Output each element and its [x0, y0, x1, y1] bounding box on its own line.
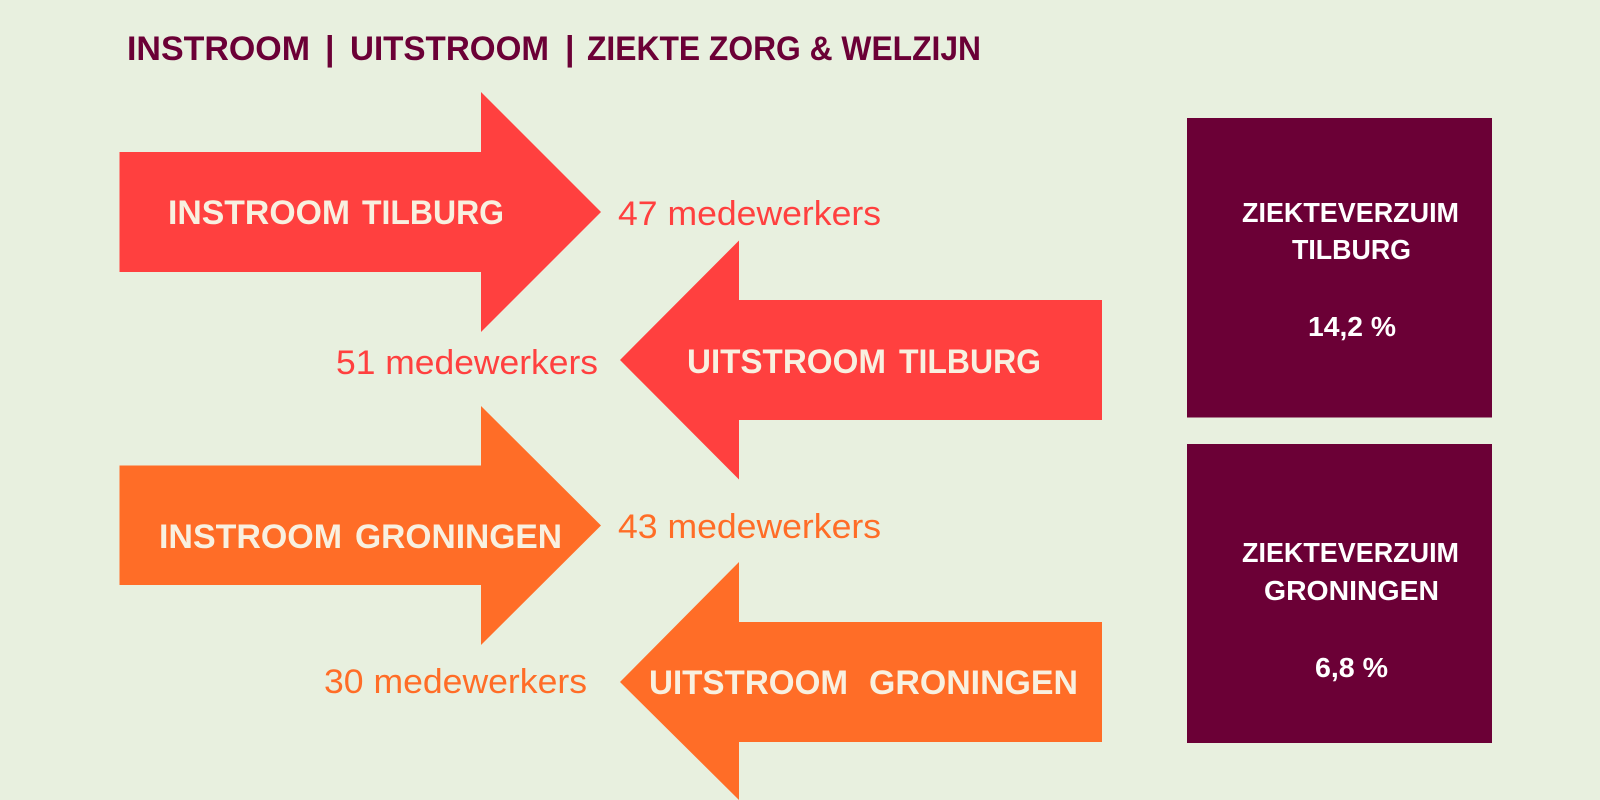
panel: ziekteverzuim Groningen: 6,8 % [1315, 652, 1388, 683]
panel: ziekteverzuim Tilburg [1187, 118, 1492, 418]
value: instroom Groningen: 43 medewerkers [618, 508, 881, 546]
arrow: uitstroom Groningen: UITSTROOM [649, 664, 848, 702]
value: instroom Tilburg: 47 medewerkers [618, 195, 881, 233]
arrow: instroom Tilburg: TILBURG [362, 194, 504, 232]
value: uitstroom Groningen: 30 medewerkers [324, 663, 587, 701]
arrow: uitstroom Groningen [620, 562, 1102, 800]
title: INSTROOM [127, 30, 310, 68]
panel: ziekteverzuim Groningen [1187, 444, 1492, 743]
arrow: instroom Groningen: GRONINGEN [355, 518, 562, 556]
panel: ziekteverzuim Tilburg: ZIEKTEVERZUIM [1242, 197, 1459, 228]
value: uitstroom Tilburg: 51 medewerkers [336, 344, 598, 382]
title [127, 30, 981, 68]
arrow: uitstroom Groningen: GRONINGEN [869, 664, 1078, 702]
panel: ziekteverzuim Tilburg: TILBURG [1292, 234, 1411, 265]
arrow: uitstroom Tilburg: UITSTROOM [687, 343, 886, 381]
title: | [325, 30, 335, 68]
panel: ziekteverzuim Groningen: ZIEKTEVERZUIM [1242, 537, 1459, 568]
title: UITSTROOM [350, 30, 549, 68]
panel: ziekteverzuim Tilburg: 14,2 % [1308, 311, 1396, 342]
arrow: instroom Tilburg: INSTROOM [168, 194, 350, 232]
arrow: uitstroom Tilburg: TILBURG [899, 343, 1041, 381]
panel: ziekteverzuim Groningen: GRONINGEN [1264, 575, 1439, 606]
title: | [565, 30, 575, 68]
title: ZIEKTE ZORG & WELZIJN [587, 30, 981, 68]
arrow: instroom Tilburg [120, 92, 601, 332]
arrow: instroom Groningen: INSTROOM [159, 518, 342, 556]
arrow: instroom Groningen [120, 406, 601, 645]
arrow: uitstroom Tilburg [620, 240, 1102, 480]
